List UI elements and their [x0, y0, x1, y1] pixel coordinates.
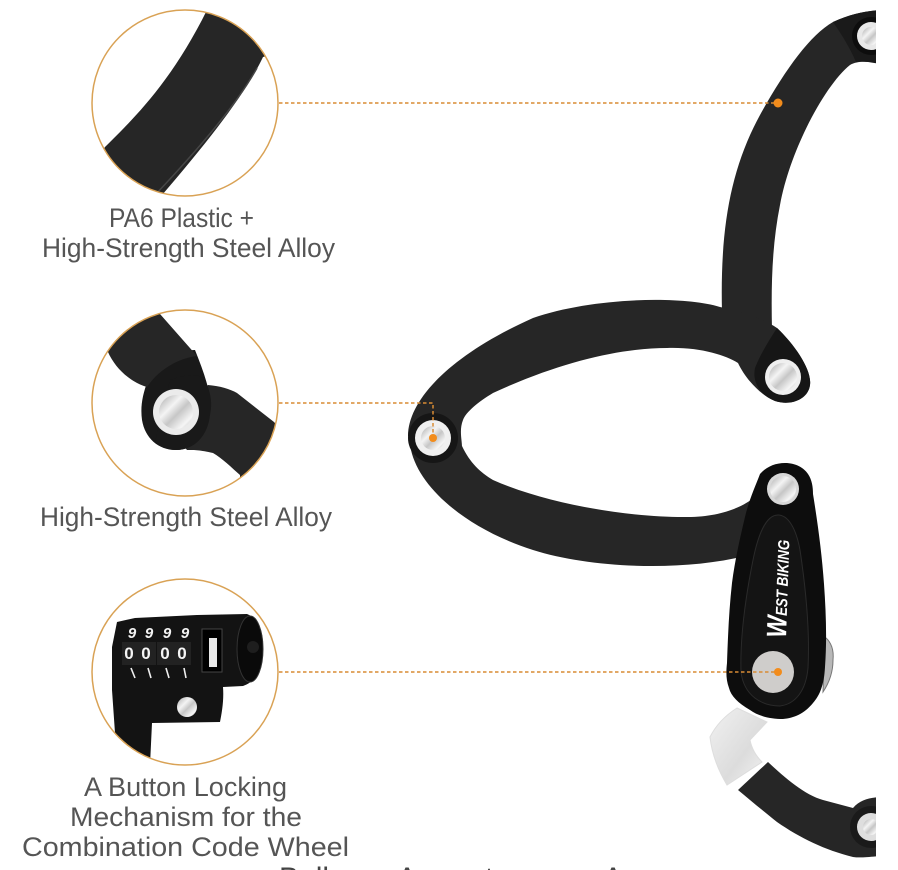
callout 2 label: High-Strength Steel Alloy [40, 502, 332, 532]
code wheel digits: 0 [124, 644, 134, 663]
code wheel digits: 9 [163, 625, 172, 642]
lock: top arm [722, 10, 890, 330]
code wheel digits: 0 [141, 644, 151, 663]
code wheel digits: 9 [128, 625, 137, 642]
callout 1: band material [42, 0, 782, 263]
callout 3 circle [92, 579, 278, 765]
code wheel digits: 9 [181, 625, 190, 642]
lock product photo [408, 10, 892, 857]
lock: middle hinged band [408, 300, 810, 566]
callout 1 label: PA6 Plastic + [109, 203, 254, 233]
callout 3 label [22, 772, 349, 862]
callout 1 label: High-Strength Steel Alloy [42, 233, 335, 263]
lock: left hinge pin [415, 420, 451, 456]
lock: silver latch [710, 708, 767, 785]
lock: bottom arm [738, 762, 876, 858]
callout 1 label [42, 203, 335, 263]
lock: black housing [726, 463, 826, 719]
callout 1 leader line [279, 98, 782, 108]
callout 2: hinge material [40, 290, 437, 532]
slider window [202, 629, 222, 672]
code wheel digits: 9 [145, 625, 154, 642]
lock: silver side plate [823, 637, 833, 692]
lock: right hinge pin [765, 359, 801, 395]
callout 3 leader line [279, 668, 782, 676]
cropped caption at bottom edge [279, 862, 623, 870]
callout 2 leader line [279, 403, 437, 442]
code wheel digits: 0 [177, 644, 187, 663]
callout 3 label: Combination Code Wheel [22, 832, 349, 862]
button pin [177, 697, 197, 717]
code wheel digits [122, 625, 191, 678]
lock: housing top pin [767, 473, 799, 505]
code wheel digits: 0 [160, 644, 170, 663]
callout 2 circle [91, 309, 279, 497]
callout 3 label: Mechanism for the [70, 802, 302, 832]
lock: brand logo: WEST BIKING [761, 539, 795, 638]
callout 1 circle [91, 9, 279, 197]
callout 3: combination wheel [22, 579, 782, 862]
lock: housing large pin [752, 651, 794, 693]
callout 3 label: A Button Locking [84, 772, 287, 802]
